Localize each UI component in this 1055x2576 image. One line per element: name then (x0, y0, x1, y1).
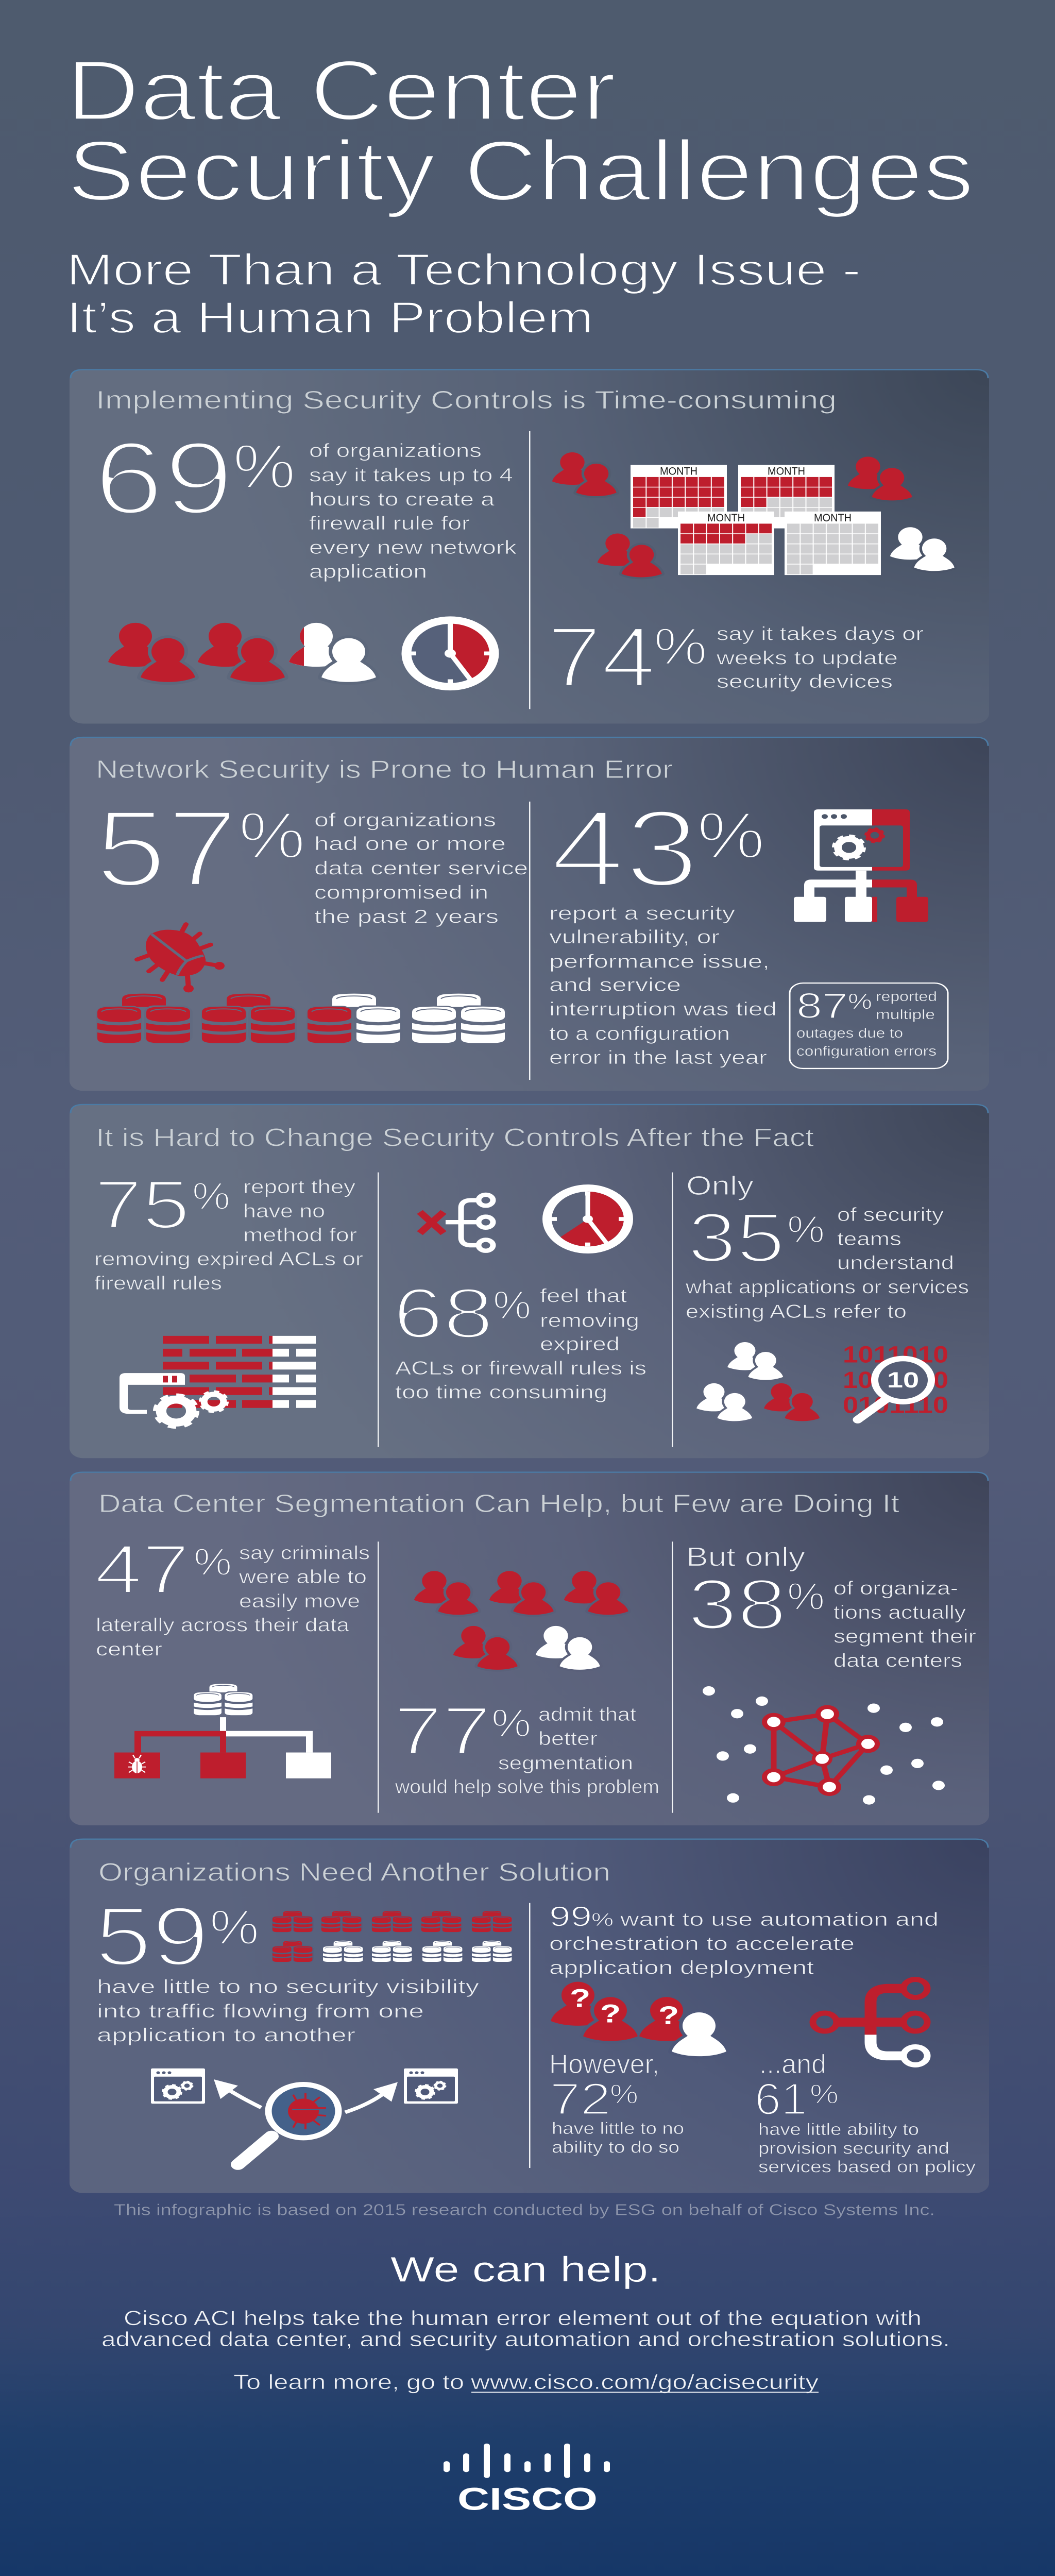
icon: database stacks (96, 994, 507, 1043)
stat 68%: ACLs or firewall rules is (395, 1358, 646, 1379)
stat 57% (95, 787, 528, 927)
stat 69%: application (309, 561, 427, 582)
stat 47%: say criminals (239, 1543, 370, 1564)
panel: implementing security controls (70, 369, 989, 723)
icon: people group (108, 623, 376, 682)
stat 75%: report they (243, 1176, 355, 1197)
stat 69%: 69 (94, 420, 234, 536)
panel: hard to change controls (70, 1105, 989, 1458)
stat 47%: % (194, 1541, 232, 1583)
stat 75%: method for (243, 1225, 357, 1246)
icon: calendars with people: MONTH (660, 465, 697, 477)
stat 61%: % (810, 2079, 839, 2109)
stat 57%: of organizations (314, 809, 496, 831)
stat 72%: % (610, 2079, 638, 2109)
stat 35%: of security (837, 1204, 944, 1225)
stat 99%: orchestration to accelerate (549, 1933, 855, 1955)
link line: To learn more, go to (233, 2370, 464, 2394)
stat 61%: provision security and (758, 2139, 949, 2157)
icon: calendars with people (552, 452, 955, 577)
stat 43%: error in the last year (549, 1047, 767, 1068)
stat 57%: % (239, 799, 305, 872)
stat 57%: had one or more (314, 834, 506, 855)
stat 61%: have little ability to (758, 2120, 919, 2139)
stat 43%: performance issue, (549, 951, 770, 972)
stat 77%: segmentation (498, 1753, 633, 1774)
stat 69%: % (233, 432, 296, 502)
stat 61%: ...and (759, 2049, 826, 2079)
callout: 87% reported: configuration errors (796, 1044, 937, 1059)
panel: segmentation can help (70, 1472, 989, 1825)
stat 35%: Only (686, 1171, 754, 1200)
stat 35%: understand (837, 1252, 954, 1274)
stat 99%: application deployment (549, 1957, 814, 1978)
stat 59%: % (210, 1900, 259, 1955)
callout: 87% reported (790, 983, 948, 1069)
panel: need another solution (70, 1839, 989, 2193)
stat 69%: every new network (309, 537, 517, 558)
stat 68%: removing (540, 1310, 639, 1331)
stat 99%: % (591, 1909, 614, 1930)
stat 35% (685, 1171, 969, 1322)
stat 72% (549, 2049, 684, 2156)
stat 35%: % (787, 1209, 825, 1251)
heading: It is Hard to Change Security Controls After the Fact (96, 1124, 814, 1152)
stat 43%: interruption was tied (549, 999, 777, 1020)
heading: Organizations Need Another Solution (98, 1858, 610, 1886)
stat 35%: teams (837, 1229, 901, 1250)
stat 77%: admit that (538, 1704, 636, 1725)
stat 75%: firewall rules (94, 1273, 222, 1294)
closing copy: Cisco ACI helps take the human error element out of the equation with (124, 2307, 922, 2330)
icon: confused people: ? (600, 1999, 621, 2028)
icon: confused people: ? (658, 2001, 679, 2030)
stat 74%: say it takes days or (717, 623, 924, 645)
we can help heading: We can help. (390, 2250, 661, 2289)
icon: people (696, 1342, 820, 1421)
stat 75%: % (192, 1175, 230, 1217)
stat 43%: to a configuration (549, 1023, 730, 1044)
icon: configuration window and tree (794, 809, 928, 922)
stat 68%: feel that (540, 1285, 627, 1307)
closing copy (101, 2307, 950, 2351)
stat 61% (755, 2049, 976, 2176)
stat 38%: of organiza- (833, 1578, 958, 1599)
stat 59%: 59 (95, 1889, 209, 1984)
stat 74% (547, 609, 924, 705)
cisco logo: CISCO (457, 2482, 598, 2517)
research note: This infographic is based on 2015 research conducted by ESG on behalf of Cisco Systems Inc. (114, 2201, 935, 2218)
icon: confused people (551, 1982, 726, 2056)
stat 43% (549, 787, 777, 1068)
callout: 87% reported: multiple (876, 1008, 935, 1022)
main title: Data Center (66, 43, 616, 139)
stat 68%: % (493, 1283, 531, 1327)
stat 77%: % (491, 1701, 531, 1745)
icon: calendars with people: MONTH (768, 465, 805, 477)
stat 69% (94, 420, 517, 582)
icon: calendars with people: MONTH (814, 512, 852, 524)
icon: confused people: ? (570, 1984, 590, 2012)
stat 69%: firewall rule for (309, 513, 470, 534)
stat 77%: better (538, 1728, 598, 1750)
stat 72%: ability to do so (552, 2138, 679, 2156)
stat 68%: too time consuming (395, 1382, 607, 1403)
stat 57%: 57 (95, 787, 238, 910)
stat 74%: % (654, 618, 707, 676)
stat 38%: % (787, 1575, 825, 1618)
icon: magnifier over binary: 1001010 (843, 1367, 948, 1393)
stat 38%: data centers (833, 1650, 962, 1671)
stat 47%: 47 (95, 1530, 190, 1608)
icon: clock (547, 1188, 628, 1250)
icon: clock (406, 620, 494, 687)
stat 47% (95, 1530, 370, 1660)
panel: network security human error (70, 737, 989, 1091)
stat 74%: security devices (717, 671, 893, 692)
stat 69%: say it takes up to 4 (309, 465, 513, 486)
stat 61%: services based on policy (758, 2157, 976, 2176)
heading: Data Center Segmentation Can Help, but Few are Doing It (98, 1490, 899, 1518)
link line (233, 2370, 819, 2394)
stat 59%: application to another (97, 2025, 355, 2046)
subtitle: More Than a Technology Issue - (66, 245, 861, 295)
stat 47%: easily move (239, 1591, 360, 1612)
stat 99%: want to use automation and (620, 1909, 939, 1930)
stat 72%: have little to no (552, 2119, 684, 2138)
callout: 87% reported: reported (876, 990, 937, 1004)
cisco logo (444, 2444, 610, 2517)
stat 75%: 75 (94, 1166, 190, 1243)
icon: segmented network tree (114, 1684, 331, 1778)
stat 47%: center (96, 1639, 162, 1660)
icon: people (414, 1571, 628, 1670)
stat 43%: report a security (549, 903, 735, 924)
stat 69%: hours to create a (309, 489, 495, 510)
stat 77%: would help solve this problem (395, 1776, 659, 1798)
stat 68% (393, 1274, 646, 1403)
icon: magnifier over binary: 0101110 (843, 1392, 948, 1418)
icon: database rows (272, 1911, 513, 1962)
stat 35%: existing ACLs refer to (686, 1301, 907, 1322)
stat 77%: 77 (394, 1692, 491, 1769)
closing copy: advanced data center, and security automation and orchestration solutions. (101, 2328, 950, 2351)
stat 99% (549, 1901, 939, 1978)
callout: 87% reported: outages due to (796, 1026, 903, 1041)
stat 61%: 61 (755, 2074, 807, 2124)
stat 75%: removing expired ACLs or (94, 1248, 363, 1269)
callout: 87% reported: 87 (796, 986, 848, 1026)
icon: firewall with gears (120, 1336, 316, 1426)
stat 47%: were able to (239, 1566, 367, 1587)
subtitle: It’s a Human Problem (66, 293, 593, 343)
stat 35%: 35 (688, 1198, 785, 1277)
main title: Security Challenges (67, 123, 974, 219)
stat 38%: tions actually (833, 1602, 966, 1623)
icon: orchestration fork (813, 1979, 927, 2065)
icon: magnifier over binary (843, 1342, 948, 1420)
stat 43%: and service (549, 975, 681, 996)
stat 38%: segment their (833, 1626, 976, 1647)
stat 38% (686, 1541, 976, 1671)
footer (101, 2201, 950, 2517)
stat 74%: 74 (547, 609, 656, 705)
stat 72%: However, (549, 2049, 659, 2079)
link line: www.cisco.com/go/acisecurity (470, 2370, 819, 2394)
stat 68%: expired (540, 1333, 620, 1355)
stat 38%: But only (686, 1541, 806, 1572)
icon: magnifier over binary: 1011010 (843, 1342, 948, 1368)
stat 57%: the past 2 years (314, 906, 499, 927)
stat 74%: weeks to update (716, 648, 898, 669)
subtitle (66, 245, 861, 343)
stat 43%: % (697, 799, 765, 872)
icon: bug (137, 924, 225, 992)
stat 43%: vulnerability, or (549, 927, 720, 948)
icon: fork with cross (420, 1195, 493, 1251)
stat 75% (94, 1166, 363, 1294)
icon: network graph (703, 1686, 945, 1805)
heading: Network Security is Prone to Human Error (96, 756, 673, 784)
stat 77% (394, 1692, 659, 1798)
stat 59%: into traffic flowing from one (97, 2001, 424, 2022)
stat 43%: 43 (551, 787, 699, 910)
stat 72%: 72 (550, 2074, 611, 2124)
stat 57%: data center service (314, 858, 528, 879)
stat 75%: have no (243, 1201, 325, 1222)
icon: magnifier over binary: 10 (887, 1368, 919, 1393)
title block (66, 43, 974, 343)
icon: calendars with people: MONTH (707, 512, 745, 524)
stat 59% (95, 1889, 479, 2046)
stat 69%: of organizations (309, 440, 482, 462)
stat 38%: 38 (688, 1565, 787, 1645)
stat 68%: 68 (393, 1274, 494, 1353)
stat 99%: 99 (549, 1901, 592, 1933)
stat 35%: what applications or services (685, 1277, 969, 1298)
main title (66, 43, 974, 219)
stat 59%: have little to no security visibility (97, 1976, 479, 1997)
stat 57%: compromised in (314, 882, 488, 903)
stat 47%: laterally across their data (96, 1615, 350, 1636)
icon: magnifier between application windows (151, 2069, 458, 2164)
heading: Implementing Security Controls is Time-consuming (96, 386, 837, 414)
callout: 87% reported: % (848, 989, 872, 1014)
